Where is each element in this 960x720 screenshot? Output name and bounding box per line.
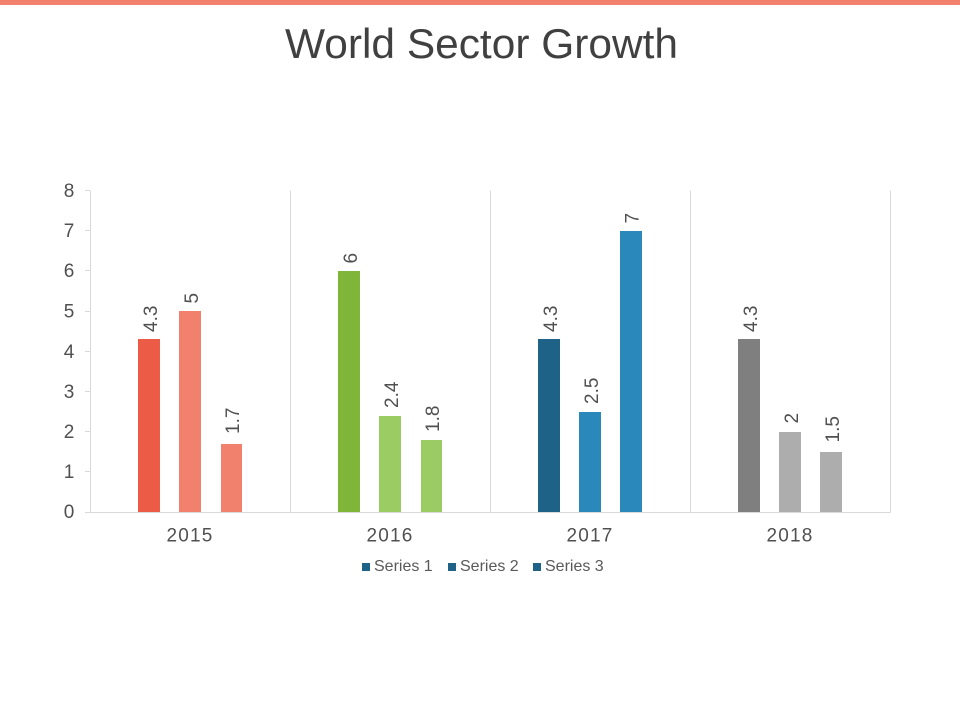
y axis labels: 5 (64, 302, 74, 322)
bars 2017 (538, 231, 642, 512)
legend: Series 1 (374, 558, 433, 575)
bar chart (64, 181, 890, 546)
y axis labels: 3 (64, 382, 74, 403)
y axis labels: 8 (64, 181, 74, 202)
bars 2015 (138, 311, 242, 512)
data labels (141, 213, 844, 442)
x axis labels: 2016 (366, 526, 414, 546)
x axis labels: 2017 (566, 526, 614, 546)
data labels: 4.3 (541, 306, 562, 332)
data labels: 4.3 (741, 306, 762, 332)
data labels: 2.5 (582, 378, 603, 404)
legend (362, 558, 604, 575)
x axis labels: 2015 (166, 526, 214, 546)
y axis labels (64, 181, 75, 523)
top accent bar (0, 0, 960, 5)
data labels: 7 (622, 213, 644, 224)
y axis labels: 1 (64, 462, 74, 483)
data labels: 4.3 (141, 306, 162, 332)
y axis labels: 0 (64, 502, 74, 523)
data labels: 2.4 (382, 381, 403, 408)
x axis labels: 2018 (766, 526, 814, 546)
data labels: 2 (782, 413, 803, 424)
data labels: 6 (341, 253, 362, 264)
bars 2018 (738, 339, 842, 512)
y axis labels: 6 (64, 261, 74, 282)
bars 2016 (338, 271, 442, 512)
data labels: 5 (182, 293, 203, 304)
legend: Series 3 (545, 558, 604, 575)
y axis labels: 7 (64, 221, 74, 242)
legend: Series 2 (460, 558, 519, 575)
y axis labels: 4 (64, 342, 75, 363)
title: World Sector Growth (285, 20, 678, 67)
data labels: 1.8 (423, 406, 444, 432)
x axis labels (166, 526, 814, 546)
y axis labels: 2 (64, 422, 74, 443)
data labels: 1.7 (223, 408, 244, 434)
data labels: 1.5 (823, 416, 844, 442)
